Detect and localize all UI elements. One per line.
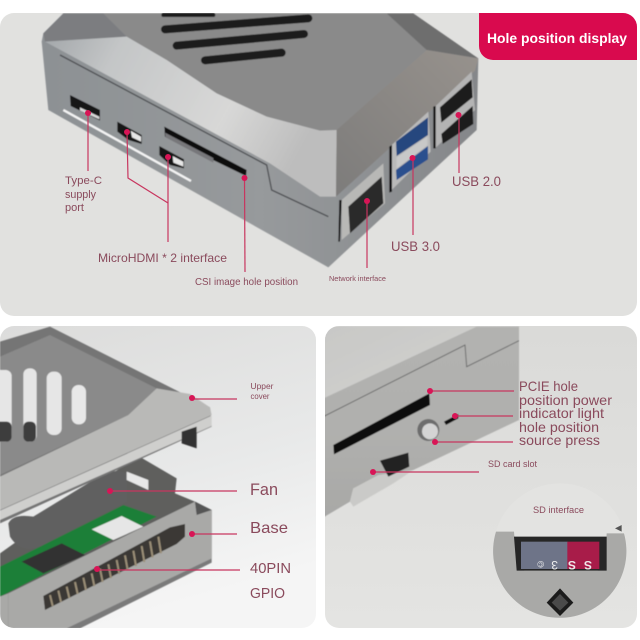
label: pcie and power: source press	[519, 432, 600, 448]
label: network: Network interface	[329, 274, 386, 283]
panel: exploded view	[0, 326, 316, 633]
illustration: exploded case	[0, 327, 212, 633]
label: sd card slot: SD card slot	[488, 459, 537, 469]
label: 40pin gpio: 40PIN	[250, 560, 291, 577]
label: 40pin gpio	[250, 560, 291, 602]
label: type-c supply port: Type-C	[65, 175, 102, 187]
label: base: Base	[250, 520, 288, 537]
label: sd interface: SD interface	[533, 505, 584, 515]
label: upper cover: cover	[250, 392, 270, 401]
label: usb 2.0: USB 2.0	[452, 174, 501, 189]
text: SD card markings: ©	[537, 559, 544, 569]
panel: side buttons and SD	[320, 326, 637, 628]
label: type-c supply port: port	[65, 202, 84, 214]
callout lines: side panel	[373, 391, 514, 472]
label: pcie and power	[519, 378, 612, 448]
text: SD card markings: SS	[568, 558, 592, 572]
label: csi: CSI image hole position	[195, 276, 298, 288]
label: pcie and power: position power	[519, 392, 612, 408]
badge: hole position display	[479, 13, 637, 60]
callout lines: top panel	[88, 113, 459, 272]
label: 40pin gpio: GPIO	[250, 585, 285, 602]
label: upper cover	[250, 382, 274, 401]
panel: hole position display	[0, 13, 637, 316]
callout dots: exploded view	[94, 395, 195, 572]
label: pcie and power: PCIE hole	[519, 378, 578, 394]
text: SD card markings: 3	[551, 558, 558, 572]
label: type-c supply port: supply	[65, 189, 96, 201]
label: usb 3.0: USB 3.0	[391, 239, 440, 254]
label: microhdmi: MicroHDMI * 2 interface	[98, 251, 227, 265]
callout dots: top panel	[85, 110, 462, 204]
label: type-c supply port	[65, 175, 102, 214]
callout dots: side panel	[370, 388, 458, 475]
label: fan: Fan	[250, 480, 278, 499]
inset: SD interface	[493, 483, 627, 618]
label: upper cover: Upper	[250, 382, 274, 391]
text: SD card markings	[537, 558, 592, 572]
label: pcie and power: indicator light	[519, 405, 604, 421]
label: pcie and power: hole position	[519, 419, 599, 435]
callout lines: exploded view	[97, 399, 240, 570]
illustration: case side	[320, 327, 519, 519]
illustration: case with ports	[42, 13, 478, 267]
badge: hole position display: Hole position display	[487, 30, 627, 46]
